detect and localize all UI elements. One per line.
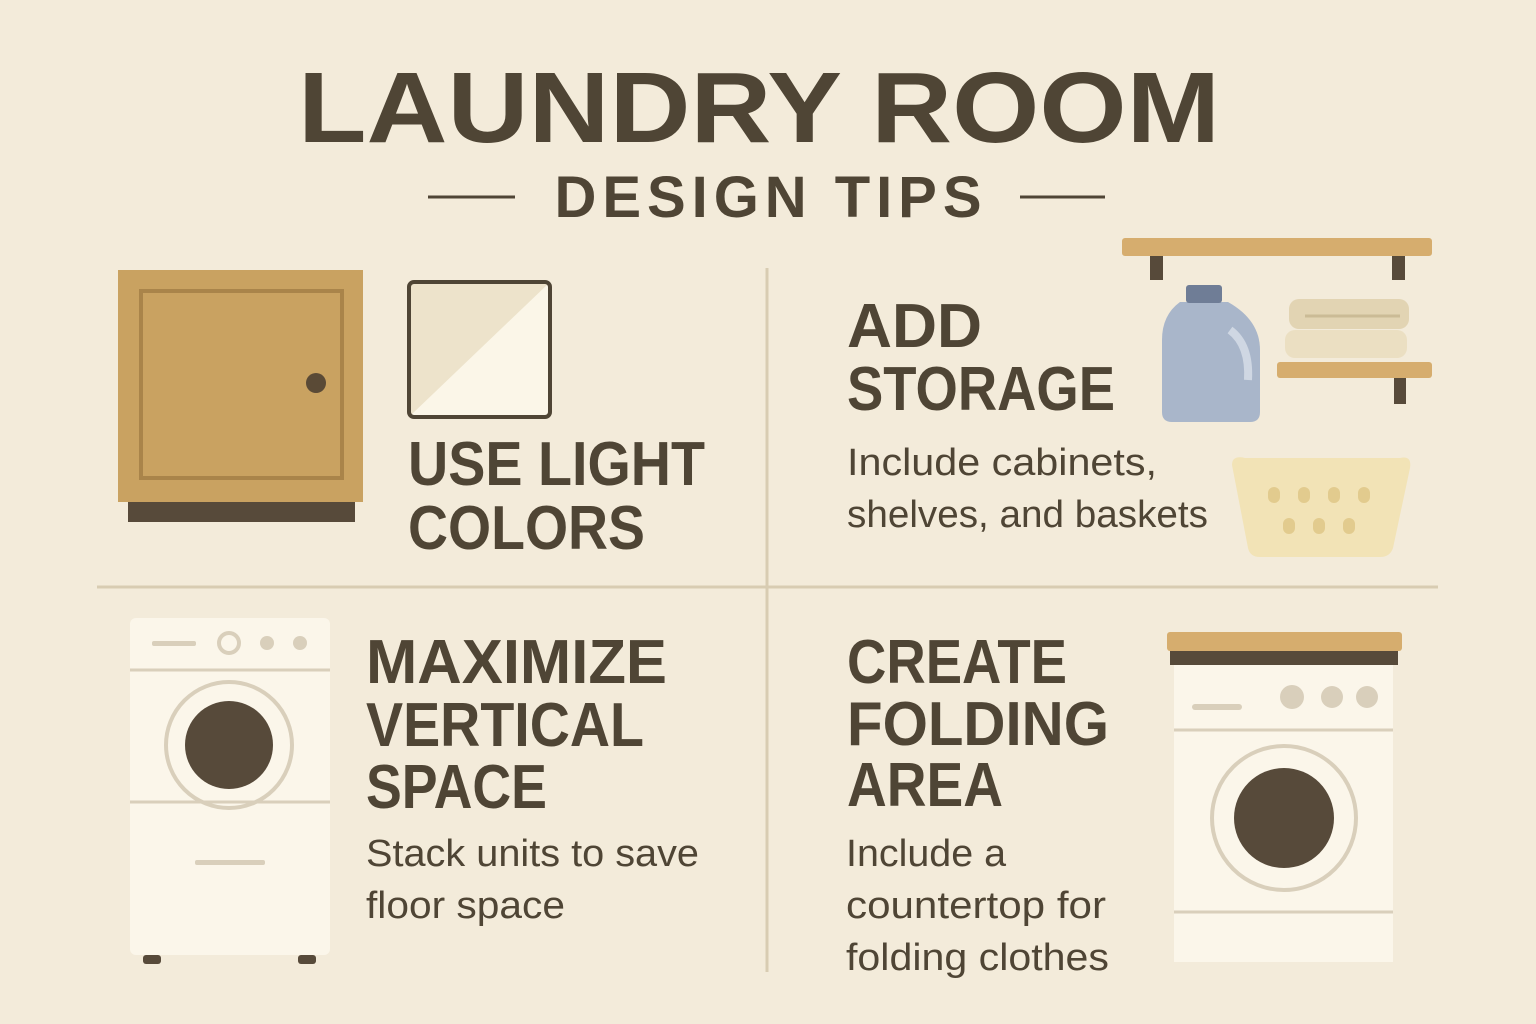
icon: stacked washer bbox=[130, 618, 330, 964]
icon: basket bbox=[1232, 457, 1410, 557]
panel: maximize vertical space bbox=[130, 618, 699, 964]
heading: VERTICAL bbox=[366, 691, 644, 760]
text block: countertop for bbox=[846, 885, 1106, 927]
heading: MAXIMIZE bbox=[366, 628, 667, 697]
heading: ADD bbox=[847, 292, 982, 361]
title: LAUNDRY ROOM bbox=[298, 52, 1220, 164]
heading: AREA bbox=[847, 751, 1003, 820]
heading: CREATE bbox=[847, 628, 1067, 697]
heading: USE LIGHT bbox=[408, 430, 705, 499]
icon: detergent bottle bbox=[1162, 285, 1260, 422]
subtitle: DESIGN TIPS bbox=[554, 165, 982, 230]
heading: FOLDING bbox=[847, 690, 1109, 759]
text block: folding clothes bbox=[846, 937, 1109, 979]
icon: shelves bbox=[1122, 238, 1432, 404]
panel: create folding area bbox=[846, 628, 1402, 979]
icon: washer with countertop bbox=[1167, 632, 1402, 962]
text block: Include cabinets, bbox=[847, 442, 1157, 484]
text block: floor space bbox=[366, 885, 565, 927]
panel: add storage bbox=[847, 238, 1432, 557]
heading: STORAGE bbox=[847, 355, 1115, 424]
icon: towels bbox=[1285, 299, 1409, 358]
text block: Stack units to save bbox=[366, 833, 699, 875]
heading: SPACE bbox=[366, 753, 547, 822]
icon: cabinet bbox=[118, 270, 363, 522]
text block: Include a bbox=[846, 833, 1007, 875]
heading: COLORS bbox=[408, 494, 645, 563]
icon: color swatch bbox=[409, 282, 550, 417]
text block: shelves, and baskets bbox=[847, 494, 1208, 536]
panel: use light colors bbox=[118, 270, 705, 563]
